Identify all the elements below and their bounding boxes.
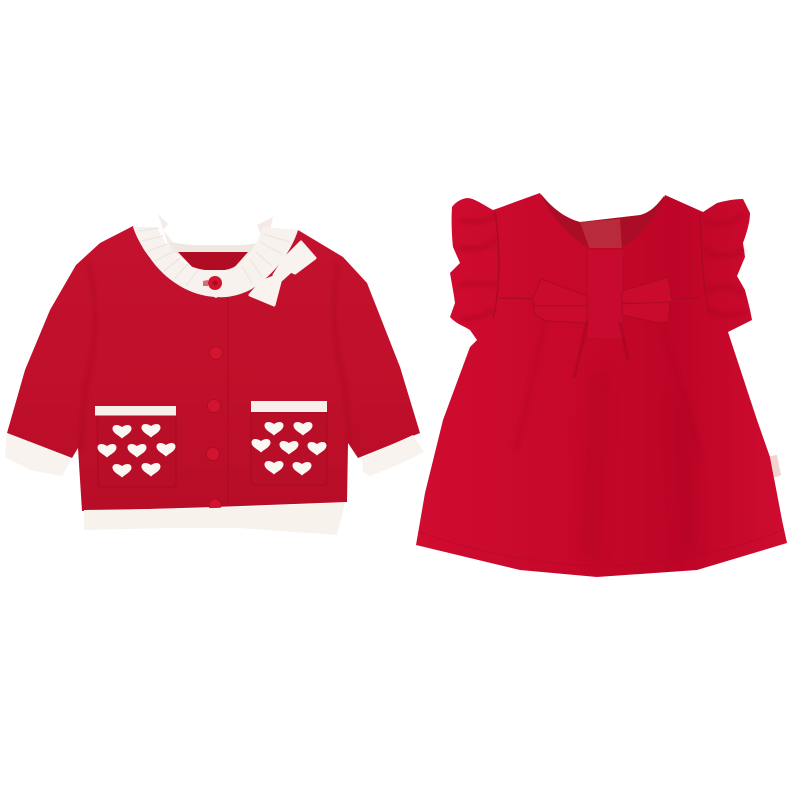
right ruffle shading [704,215,746,316]
cardigan buttons [206,346,222,511]
hem [84,503,345,535]
centre band [587,249,623,339]
yoke seam [500,298,700,300]
dress [416,193,787,577]
left cuff [5,433,72,476]
collar [133,227,298,297]
hem stitching [420,530,782,566]
collar ribbing [139,228,290,286]
pleat lines [574,322,628,378]
side label tag [770,455,781,478]
dress inner back neck [541,194,664,256]
pleats [515,322,700,460]
right cuff [362,435,424,476]
cardigan body and sleeves [7,226,420,511]
dress bow right [622,277,672,323]
left pocket [95,406,176,487]
sleeve shading [80,262,350,505]
collar button [203,276,222,290]
right pocket [251,401,327,485]
armhole seams [493,212,710,318]
left ruffle shading [458,215,497,318]
bow [250,242,315,305]
cardigan back neck [158,214,273,272]
skirt fold shading [590,370,690,560]
cardigan [5,214,424,535]
product illustration [5,193,787,577]
dress silhouette [416,193,787,577]
dress bow left [532,279,587,323]
